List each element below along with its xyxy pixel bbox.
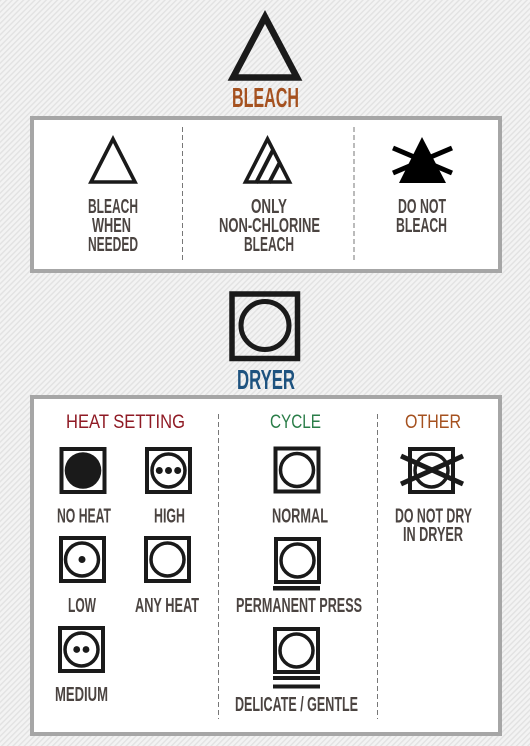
icon: large dryer [232, 294, 298, 358]
icon: do not dry in dryer [401, 449, 463, 492]
label: do not bleach: DO NOT [398, 195, 446, 218]
icon: no heat [62, 449, 104, 492]
heading: cycle: CYCLE [270, 411, 321, 433]
heading: other: OTHER [405, 411, 461, 433]
icon: normal cycle [276, 448, 318, 492]
icon: large bleach triangle [233, 17, 297, 78]
label: high: HIGH [154, 504, 185, 528]
heading: heat setting: HEAT SETTING [66, 411, 185, 433]
label: only non-chlorine bleach: NON-CHLORINE [219, 214, 320, 237]
icon: any heat [146, 538, 189, 581]
label: low: LOW [68, 594, 96, 617]
icon: bleach when needed [91, 139, 135, 182]
label: do not dry in dryer: DO NOT DRY [395, 504, 472, 528]
label: medium: MEDIUM [55, 683, 108, 706]
label: bleach when needed: BLEACH [88, 195, 138, 218]
label: do not dry in dryer [395, 504, 472, 546]
icon: high [147, 449, 190, 492]
label: only non-chlorine bleach: ONLY [251, 195, 287, 218]
panel: dryer [32, 397, 500, 734]
label: delicate / gentle: DELICATE / GENTLE [235, 693, 358, 716]
label: do not dry in dryer: IN DRYER [403, 523, 463, 546]
panel: bleach [32, 118, 500, 271]
heading: bleach: BLEACH [232, 82, 299, 113]
label: no heat: NO HEAT [57, 504, 111, 528]
label: any heat: ANY HEAT [135, 594, 199, 617]
heading: dryer: DRYER [237, 364, 295, 395]
label: only non-chlorine bleach: BLEACH [244, 233, 294, 256]
label: do not bleach [396, 195, 447, 237]
label: bleach when needed: WHEN [92, 214, 131, 237]
icon: permanent press [273, 539, 320, 590]
icon: low [61, 538, 104, 581]
icon: do not bleach [393, 137, 452, 183]
label: bleach when needed: NEEDED [88, 233, 138, 256]
label: permanent press: PERMANENT PRESS [236, 594, 362, 617]
icon: only non-chlorine bleach [246, 139, 290, 183]
icon: delicate / gentle [273, 629, 320, 688]
icon: medium [60, 628, 103, 671]
label: normal: NORMAL [272, 504, 328, 528]
label: do not bleach: BLEACH [396, 214, 447, 237]
label: bleach when needed [88, 195, 138, 256]
label: only non-chlorine bleach [219, 195, 320, 256]
